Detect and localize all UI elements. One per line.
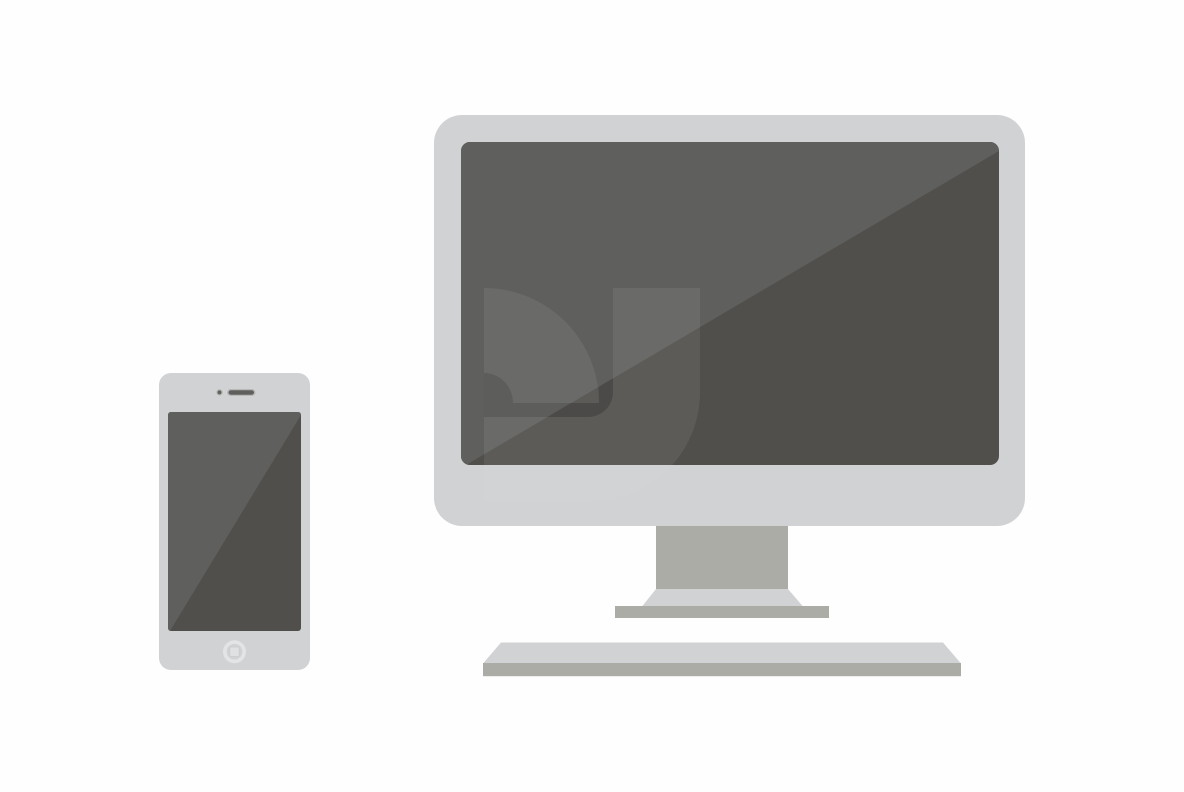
phone screen (168, 412, 301, 631)
illustration: phone and desktop computer (159, 115, 1025, 676)
logo left quarter shape (484, 288, 599, 403)
monitor foot top (642, 589, 803, 606)
logo right and lower shape (484, 288, 700, 465)
phone (159, 373, 310, 670)
logo hole shade (484, 373, 613, 417)
phone speaker (227, 389, 256, 396)
monitor screen (461, 142, 999, 465)
monitor bezel (434, 115, 1025, 526)
desktop computer (434, 115, 1025, 676)
phone body (159, 373, 310, 670)
phone home button (223, 640, 246, 663)
phone camera dot (216, 389, 223, 396)
monitor stand neck (656, 525, 788, 589)
logo lower shape on bezel (484, 288, 700, 502)
logo gap shadow below glare (547, 378, 613, 417)
monitor foot base (615, 606, 829, 618)
monitor screen glare (461, 142, 999, 465)
keyboard top (483, 642, 961, 664)
watermark logo (484, 288, 700, 465)
keyboard front (483, 663, 961, 676)
phone screen glare (168, 412, 301, 631)
